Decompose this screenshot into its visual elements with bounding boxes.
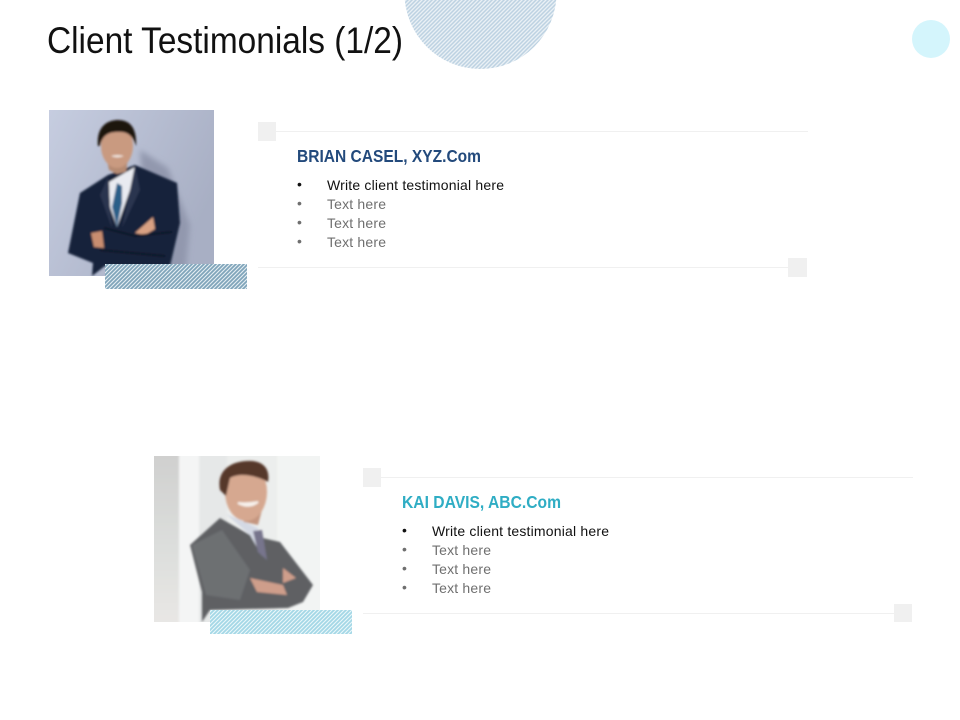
testimonial bullet list: Text here	[432, 542, 491, 558]
top rule and square	[363, 468, 913, 487]
decorative aqua circle	[912, 20, 950, 58]
testimonial bullet list: Write client testimonial here	[432, 523, 609, 539]
photo: Kai Davis	[154, 456, 320, 622]
hatched accent bar	[210, 610, 352, 634]
testimonial bullet list: •	[297, 214, 302, 230]
decorative hatched circle	[404, 0, 556, 69]
testimonial bullet list: Text here	[327, 234, 386, 250]
testimonial bullet list: •	[297, 233, 302, 249]
testimonial bullet list: •	[402, 541, 407, 557]
title: Client Testimonials (1/2)	[47, 20, 403, 61]
testimonial bullet list: Text here	[432, 580, 491, 596]
testimonial bullet list: Text here	[327, 215, 386, 231]
testimonial bullet list: •	[297, 195, 302, 211]
testimonial bullet list: •	[402, 522, 407, 538]
testimonial bullet list: Text here	[327, 196, 386, 212]
client name: BRIAN CASEL, XYZ.Com	[297, 146, 481, 166]
testimonial bullet list: Write client testimonial here	[327, 177, 504, 193]
panel: Brian Casel testimonial	[49, 110, 808, 289]
testimonial bullet list	[402, 522, 609, 596]
photo: Brian Casel	[49, 110, 214, 276]
top rule and square	[258, 122, 808, 141]
testimonial bullet list: •	[297, 176, 302, 192]
testimonial bullet list: •	[402, 560, 407, 576]
client name: KAI DAVIS, ABC.Com	[402, 492, 561, 512]
panel: Kai Davis testimonial	[150, 450, 913, 634]
testimonial bullet list	[297, 176, 504, 250]
bottom rule and square	[363, 604, 912, 622]
hatched accent bar	[105, 264, 247, 289]
testimonial bullet list: •	[402, 579, 407, 595]
bottom rule and square	[258, 258, 807, 277]
testimonial bullet list: Text here	[432, 561, 491, 577]
